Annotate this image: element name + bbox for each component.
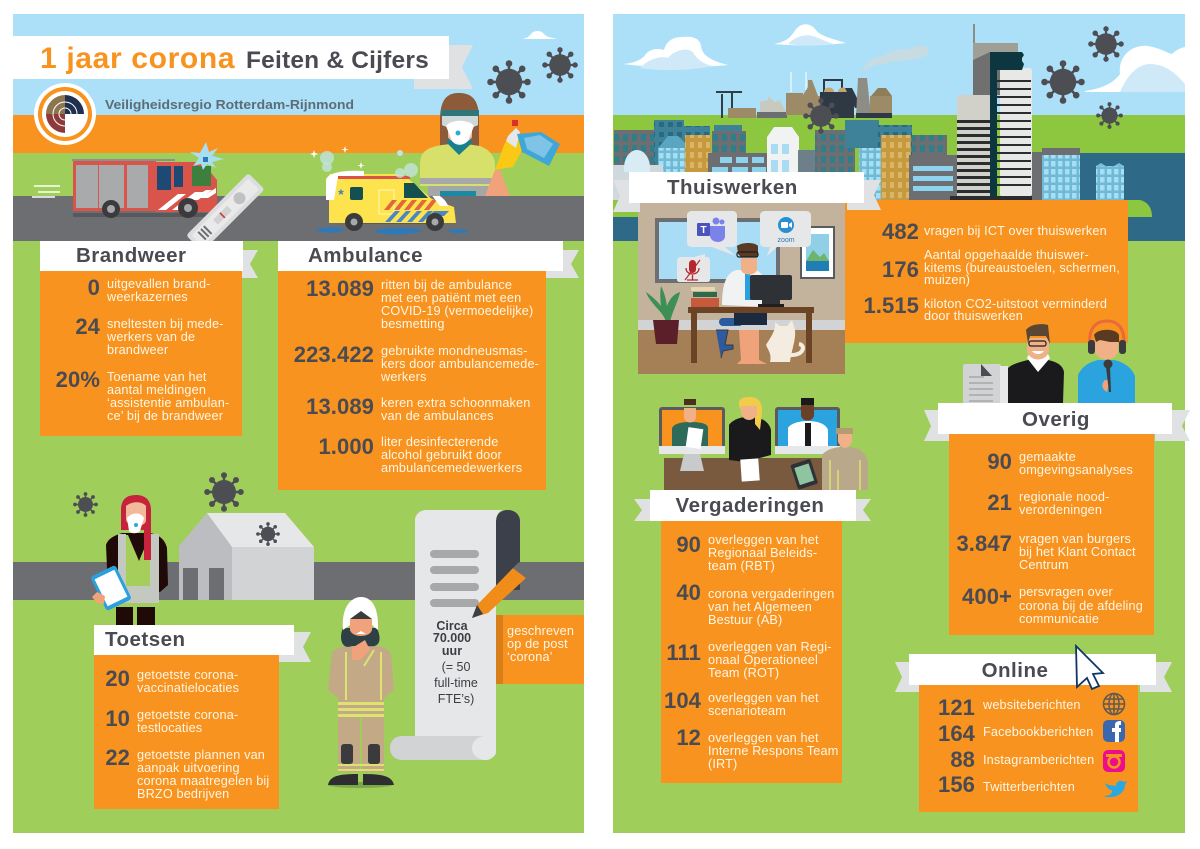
- stat: IRT: Interne Respons Team: [708, 744, 838, 758]
- stat: website: 121: [938, 695, 975, 720]
- stat: noodverordeningen: regionale nood-: [1019, 490, 1109, 504]
- illustration: rapid test cassette: [186, 173, 265, 252]
- stat: vaccinatielocaties: [105, 666, 239, 695]
- icon: globe: [1104, 694, 1125, 714]
- stat: plannen: corona maatregelen bij: [137, 774, 269, 788]
- firefighter officer: [822, 428, 868, 490]
- scroll text: FTE’s): [438, 692, 474, 706]
- stat: thuiswerkitems: Aantal opgehaalde thuiswer-: [924, 248, 1089, 262]
- callout: geschreven op de post corona: geschreven: [507, 624, 574, 638]
- stat: vragen burgers: [956, 531, 1136, 572]
- stat: persvragen: 400+: [962, 584, 1012, 609]
- stat: scenarioteam: 104: [664, 688, 702, 713]
- stat: thuiswerkitems: [882, 248, 1120, 287]
- stat: Instagram: [950, 747, 1094, 772]
- stat: schoonmaken: van de ambulances: [381, 409, 494, 423]
- stat: RBT: team (RBT): [708, 559, 775, 573]
- heading: Overig: [1022, 408, 1090, 431]
- stat: omgevingsanalyses: omgevingsanalyses: [1019, 463, 1133, 477]
- plant: [646, 286, 680, 344]
- stat: ROT: 111: [666, 640, 701, 665]
- illustration: firefighter: [328, 597, 394, 788]
- stat: plannen: aanpak uitvoering: [137, 761, 240, 775]
- stat: ritten: besmetting: [381, 317, 445, 331]
- stat: persvragen: [962, 584, 1143, 626]
- speech bubble: Zoom: zoom: [777, 237, 795, 244]
- illustration: fire truck: [32, 142, 224, 218]
- section: Thuiswerken banner: [613, 172, 881, 212]
- books: [691, 287, 719, 307]
- stat: noodverordeningen: [987, 490, 1109, 517]
- stat: RBT: [676, 532, 819, 573]
- stat: sneltesten: brandweer: [107, 343, 169, 357]
- icon: instagram: [1103, 750, 1125, 772]
- section: Thuiswerken stats: [845, 200, 1128, 343]
- stat: noodverordeningen: 21: [987, 490, 1012, 515]
- stat: uitgevallen kazernes: weerkazernes: [106, 290, 188, 304]
- clouds: [623, 24, 1185, 92]
- callout: geschreven op de post corona: ‘corona’: [507, 650, 553, 664]
- stat: Facebook: [938, 721, 1093, 746]
- stat: AB: [676, 580, 834, 627]
- stat: vaccinatielocaties: 20: [105, 666, 130, 691]
- monitor left: [659, 399, 725, 471]
- subtitle: Veiligheidsregio Rotterdam-Rijnmond: [105, 97, 354, 112]
- illustration: video meeting: [659, 397, 868, 490]
- stat: AB: corona vergaderingen: [708, 587, 834, 601]
- cat: [766, 320, 803, 362]
- heading: Ambulance: [308, 244, 423, 267]
- stat: plannen: BRZO bedrijven: [137, 787, 229, 801]
- illustration: inspector with clipboard: [90, 495, 168, 625]
- section: Vergaderingen: [634, 490, 871, 783]
- stat: vragen burgers: Centrum: [1019, 558, 1069, 572]
- stat: schoonmaken: 13.089: [306, 394, 374, 419]
- stat: mondneusmaskers: gebruikte mondneusmas-: [381, 344, 527, 358]
- stat: ROT: [666, 640, 832, 680]
- heading: Brandweer: [76, 244, 186, 267]
- stat: noodverordeningen: verordeningen: [1019, 503, 1102, 517]
- stat: uitgevallen kazernes: 0: [88, 275, 100, 300]
- stat: Facebook: Facebookberichten: [983, 725, 1093, 739]
- stat: omgevingsanalyses: 90: [987, 449, 1012, 474]
- title banner: Feiten & Cijfers: [246, 47, 429, 74]
- callout: geschreven op de post corona: op de post: [507, 637, 568, 651]
- icon: mouse cursor: [1076, 646, 1103, 689]
- stat: toename meldingen: ‘assistentie ambulan-: [107, 396, 229, 410]
- illustration: ambulance: [310, 146, 469, 235]
- icon: facebook: [1103, 720, 1125, 742]
- stat: alcohol: liter desinfecterende: [381, 435, 498, 449]
- stat: ROT: Team (ROT): [708, 666, 779, 680]
- stat: ritten: 13.089: [306, 276, 374, 301]
- stat: vaccinatielocaties: getoetste corona-: [137, 668, 238, 682]
- scroll text: full-time: [434, 676, 478, 690]
- logo Veiligheidsregio: [34, 83, 96, 145]
- stat: mondneusmaskers: kers door ambulancemede-: [381, 357, 539, 371]
- stat: Facebook: 164: [938, 721, 976, 746]
- stat: vragen burgers: bij het Klant Contact: [1019, 545, 1136, 559]
- speech bubble: Teams: [687, 211, 737, 256]
- stat: toename meldingen: [56, 367, 229, 423]
- illustration: home office room: [638, 203, 845, 374]
- stat: persvragen: corona bij de afdeling: [1019, 599, 1143, 613]
- title banner: 1 jaar corona: [40, 42, 235, 75]
- stat: Twitter: Twitterberichten: [983, 780, 1075, 794]
- desk with computer: [688, 275, 814, 363]
- virus icons middle: [73, 472, 244, 517]
- stat: alcohol: 1.000: [318, 434, 374, 459]
- illustration: scroll with pencil: [390, 510, 526, 760]
- stat: persvragen: persvragen over: [1019, 585, 1114, 599]
- scroll text: uur: [442, 644, 462, 658]
- stat: scenarioteam: scenarioteam: [708, 704, 786, 718]
- illustration: worker with spray bottle: [420, 93, 560, 196]
- callout: geschreven op de post corona: [496, 615, 584, 684]
- stat: toename meldingen: ce’ bij de brandweer: [107, 409, 224, 423]
- stat: testlocaties: testlocaties: [137, 721, 202, 735]
- stat: testlocaties: [105, 706, 238, 735]
- speech bubble: Teams: T: [700, 225, 707, 236]
- scroll text: [433, 619, 478, 706]
- stat: sneltesten: [75, 314, 224, 357]
- virus icons right: [1041, 26, 1124, 129]
- illustration: ambulance: *: [338, 186, 344, 202]
- stat: thuiswerkitems: kitems (bureaustoelen, schermen,: [924, 261, 1120, 275]
- stat: vragen ICT: [882, 219, 1107, 244]
- stat: vragen burgers: vragen van burgers: [1019, 532, 1131, 546]
- illustration: officer and journalist: [1008, 321, 1135, 403]
- stat: alcohol: ambulancemedewerkers: [381, 461, 522, 475]
- woman officer: [729, 397, 771, 482]
- stat: CO2: door thuiswerken: [924, 309, 1023, 323]
- stat: AB: van het Algemeen: [708, 600, 812, 614]
- stat: ritten: ritten bij de ambulance: [381, 278, 512, 292]
- icon: document pile: [963, 364, 1008, 407]
- panel: right page background: [613, 14, 1185, 833]
- illustration: industry skyline: [716, 72, 892, 118]
- section: Overig: [924, 403, 1190, 635]
- stat: CO2: [863, 293, 1107, 323]
- stat: website: [938, 695, 1081, 720]
- stat: omgevingsanalyses: gemaakte: [1019, 450, 1076, 464]
- stat: thuiswerkitems: 176: [882, 257, 919, 282]
- stat: scenarioteam: overleggen van het: [708, 691, 819, 705]
- stat: Instagram: Instagramberichten: [983, 753, 1094, 767]
- speech bubble: muted microphone: [677, 254, 710, 282]
- stat: ritten: COVID-19 (vermoedelijke): [381, 304, 533, 318]
- section: Brandweer: [40, 241, 258, 436]
- stat: testlocaties: 10: [105, 706, 130, 731]
- stat: Instagram: 88: [950, 747, 975, 772]
- stat: AB: Bestuur (AB): [708, 613, 782, 627]
- stat: AB: 40: [676, 580, 701, 605]
- heading: Online: [982, 659, 1048, 682]
- stat: ritten: met een patiënt met een: [381, 291, 521, 305]
- stat: IRT: 12: [676, 725, 701, 750]
- man at desk: [716, 243, 767, 364]
- stat: vragen ICT: 482: [882, 219, 919, 244]
- stat: scenarioteam: [664, 688, 819, 718]
- stat: ROT: overleggen van Regi-: [708, 640, 832, 654]
- illustration: house: [179, 513, 314, 600]
- monitor right: [775, 398, 840, 454]
- stat: thuiswerkitems: muizen): [924, 273, 970, 287]
- stat: RBT: 90: [676, 532, 701, 557]
- stat: persvragen: communicatie: [1019, 612, 1099, 626]
- stat: schoonmaken: [306, 394, 530, 423]
- stat: toename meldingen: aantal meldingen: [107, 383, 206, 397]
- stat: mondneusmaskers: 223.422: [294, 342, 374, 367]
- stat: plannen: [105, 745, 269, 801]
- stat: sneltesten: 24: [75, 314, 101, 339]
- stat: mondneusmaskers: werkers: [380, 370, 426, 384]
- scroll text: Circa: [436, 619, 469, 633]
- title banner: [13, 36, 473, 89]
- stat: ritten: [306, 276, 533, 331]
- tablet: [790, 459, 818, 490]
- scroll text: 70.000: [433, 631, 471, 645]
- stat: vragen ICT: vragen bij ICT over thuiswerken: [924, 224, 1107, 238]
- stat: vragen burgers: 3.847: [956, 531, 1012, 556]
- stat: alcohol: alcohol gebruikt door: [381, 448, 503, 462]
- illustration: city buildings: [613, 98, 959, 200]
- stat: uitgevallen kazernes: [88, 275, 211, 304]
- stat: schoonmaken: keren extra schoonmaken: [381, 396, 530, 410]
- stat: toename meldingen: 20%: [56, 367, 100, 392]
- stat: toename meldingen: Toename van het: [107, 370, 207, 384]
- stat: ROT: onaal Operationeel: [708, 653, 818, 667]
- stat: mondneusmaskers: [294, 342, 539, 384]
- illustration: blue buildings by the river: [1032, 148, 1124, 200]
- stat: IRT: (IRT): [708, 757, 737, 771]
- section: Toetsen: [94, 625, 311, 809]
- illustration: tower: [950, 24, 1042, 201]
- section: Thuiswerken banner: Thuiswerken: [667, 176, 798, 199]
- stat: vaccinatielocaties: vaccinatielocaties: [137, 681, 239, 695]
- stat: sneltesten: werkers van de: [106, 330, 195, 344]
- stat: plannen: getoetste plannen van: [137, 748, 265, 762]
- panel: left page background: [13, 14, 584, 833]
- speech bubble: Zoom: [760, 211, 811, 256]
- virus icons top left: [487, 47, 578, 104]
- section: Online: [895, 646, 1172, 812]
- stat: IRT: overleggen van het: [708, 731, 819, 745]
- stat: RBT: overleggen van het: [708, 533, 819, 547]
- stat: omgevingsanalyses: [987, 449, 1133, 477]
- stat: RBT: Regionaal Beleids-: [708, 546, 817, 560]
- icon: twitter: [1103, 781, 1127, 797]
- stat: website: websiteberichten: [982, 698, 1081, 712]
- heading: Toetsen: [105, 628, 186, 651]
- stat: CO2: kiloton CO2-uitstoot verminderd: [924, 297, 1107, 311]
- stat: CO2: 1.515: [863, 293, 919, 318]
- stat: IRT: [676, 725, 838, 771]
- stat: alcohol: [318, 434, 522, 475]
- section: Ambulance: [278, 241, 579, 490]
- heading: Vergaderingen: [676, 494, 824, 517]
- scroll text: (= 50: [442, 660, 470, 674]
- stat: sneltesten: sneltesten bij mede-: [107, 317, 224, 331]
- stat: testlocaties: getoetste corona-: [137, 708, 238, 722]
- stat: uitgevallen kazernes: uitgevallen brand-: [107, 277, 211, 291]
- stat: Twitter: [938, 772, 1075, 797]
- stat: plannen: 22: [105, 745, 130, 770]
- stat: Twitter: 156: [938, 772, 975, 797]
